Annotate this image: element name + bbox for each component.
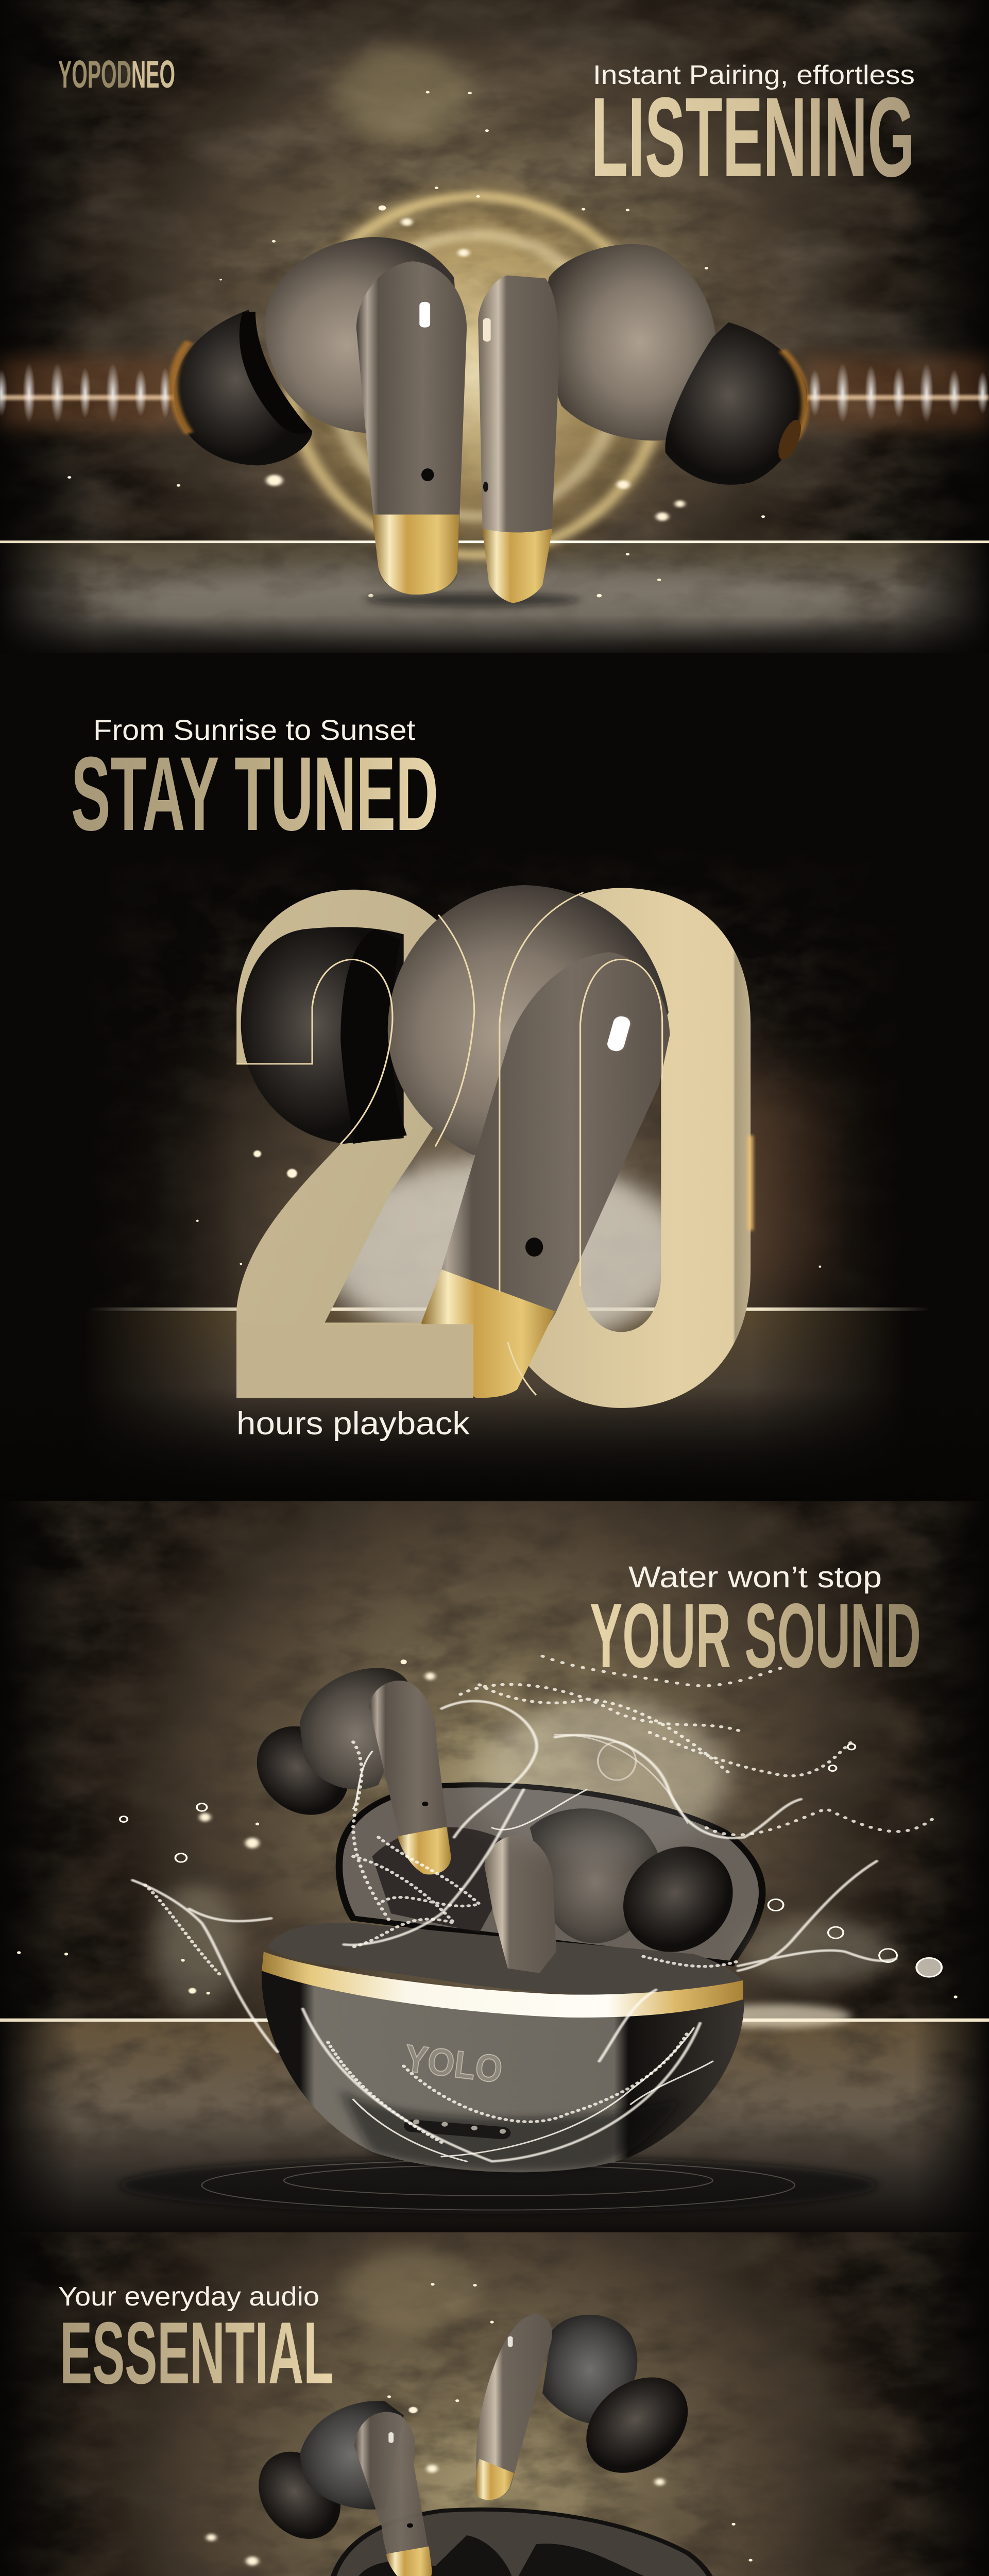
panel: instant pairing [0,0,989,734]
sound wave right [804,357,989,429]
heading: STAY TUNED [71,735,438,853]
horizon line [0,540,989,543]
sparkles [196,1150,821,1268]
water floor [0,2021,989,2233]
stage floor [0,543,989,653]
panel: battery life [0,653,989,1582]
charge dots [403,2119,511,2140]
stage floor [0,1311,989,1502]
numeral two base in front [236,1323,473,1398]
scene: listening earbuds and stage [0,0,989,653]
earbud [241,885,670,1398]
panel: everyday essential [0,2047,989,2576]
panel: water resistance [0,1313,989,2266]
right earbud [478,244,807,603]
numeral outlines [236,892,662,1395]
golden ring [262,171,691,581]
right earbud [484,1808,747,1973]
scene: charging case in water splash [0,1501,989,2225]
scene: twenty hours numeral and earbud [88,653,924,1454]
case logo: YOLO [402,2037,505,2091]
case lid [339,1785,762,1963]
caption: hours playback [236,1406,470,1442]
case bowl [262,1952,744,2172]
subheading: Instant Pairing, effortless [593,60,915,90]
heading: ESSENTIAL [60,2304,333,2402]
case lid [328,2510,718,2576]
sparkles [40,2283,753,2576]
shadows under buds [366,593,581,607]
left earbud [174,237,467,595]
scene: open charging case with floating earbuds [24,2232,966,2576]
case tray [268,1923,743,1995]
subheading: Your everyday audio [58,2282,319,2312]
earbud stem [421,952,670,1398]
water splash [120,1656,942,2161]
sparkles [17,1659,958,1998]
subheading: From Sunrise to Sunset [93,714,415,746]
numeral two [236,890,474,1398]
numeral zero [498,888,751,1408]
sparkles [67,91,765,597]
horizon line [0,2019,989,2022]
brand logo: YOPODNEO [58,53,175,96]
gold edge flare [748,1136,753,1230]
left earbud [246,2401,432,2576]
horizon line [88,1308,930,1311]
subheading: Water won’t stop [628,1561,882,1594]
right earbud [475,2314,707,2500]
sound wave left [0,357,183,429]
misty backdrop [321,1158,688,1348]
left earbud [242,1668,451,1874]
